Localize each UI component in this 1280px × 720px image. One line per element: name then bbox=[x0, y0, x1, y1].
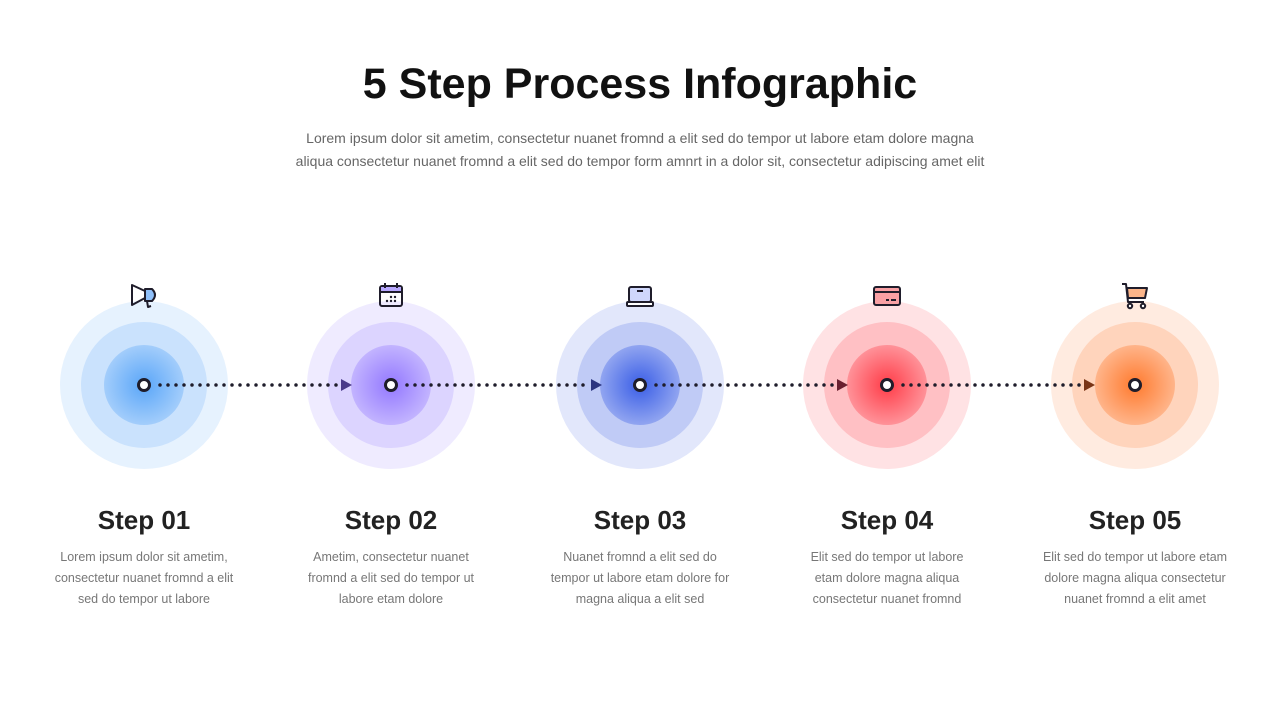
circle 1 bbox=[60, 301, 228, 469]
subtitle bbox=[296, 130, 984, 169]
title: 5 Step Process Infographic bbox=[363, 60, 917, 108]
circle 5 bbox=[1051, 301, 1219, 469]
step 4 text: Step 04 bbox=[841, 505, 933, 535]
step 1 text: consectetur nuanet fromnd a elit bbox=[55, 571, 233, 585]
step 3 text: magna aliqua a elit sed bbox=[576, 592, 704, 606]
icon: calendar bbox=[380, 283, 402, 306]
subtitle: Lorem ipsum dolor sit ametim, consectetur nuanet fromnd a elit sed do tempor ut labore etam dolore magna bbox=[306, 130, 974, 146]
icon: laptop bbox=[627, 287, 653, 306]
circle 3 bbox=[556, 301, 724, 469]
step 3 text: Step 03 bbox=[594, 505, 686, 535]
step 4 text: etam dolore magna aliqua bbox=[815, 571, 959, 585]
icon: cart bbox=[1122, 284, 1147, 308]
arrow 1 bbox=[160, 379, 352, 391]
step 5 text: Step 05 bbox=[1089, 505, 1181, 535]
icon: credit card bbox=[874, 287, 900, 305]
arrow 4 bbox=[903, 379, 1095, 391]
step 3 text: Nuanet fromnd a elit sed do bbox=[563, 550, 717, 564]
step 4 text bbox=[811, 505, 963, 606]
step 1 text: Lorem ipsum dolor sit ametim, bbox=[60, 550, 228, 564]
arrow 3 bbox=[656, 379, 848, 391]
step 2 text bbox=[308, 505, 474, 606]
step 5 text: Elit sed do tempor ut labore etam bbox=[1043, 550, 1227, 564]
subtitle: aliqua consectetur nuanet fromnd a elit sed do tempor form amnrt in a dolor sit, consectetur adipiscing amet elit bbox=[296, 153, 984, 169]
step 1 text bbox=[55, 505, 234, 606]
step 4 text: consectetur nuanet fromnd bbox=[813, 592, 961, 606]
step 3 text bbox=[550, 505, 730, 606]
step 1 text: Step 01 bbox=[98, 505, 190, 535]
circle 4 bbox=[803, 301, 971, 469]
step 5 text: dolore magna aliqua consectetur bbox=[1044, 571, 1226, 585]
step 2 text: Step 02 bbox=[345, 505, 437, 535]
step 2 text: fromnd a elit sed do tempor ut bbox=[308, 571, 474, 585]
step 4 text: Elit sed do tempor ut labore bbox=[811, 550, 963, 564]
step 3 text: tempor ut labore etam dolore for bbox=[551, 571, 729, 585]
step 5 text: nuanet fromnd a elit amet bbox=[1064, 592, 1206, 606]
step 2 text: Ametim, consectetur nuanet bbox=[313, 550, 469, 564]
circle 2 bbox=[307, 301, 475, 469]
step 2 text: labore etam dolore bbox=[339, 592, 443, 606]
icon: megaphone bbox=[132, 285, 155, 307]
step 1 text: sed do tempor ut labore bbox=[78, 592, 210, 606]
arrow 2 bbox=[407, 379, 602, 391]
node dots bbox=[138, 380, 1140, 390]
step 5 text bbox=[1043, 505, 1227, 606]
